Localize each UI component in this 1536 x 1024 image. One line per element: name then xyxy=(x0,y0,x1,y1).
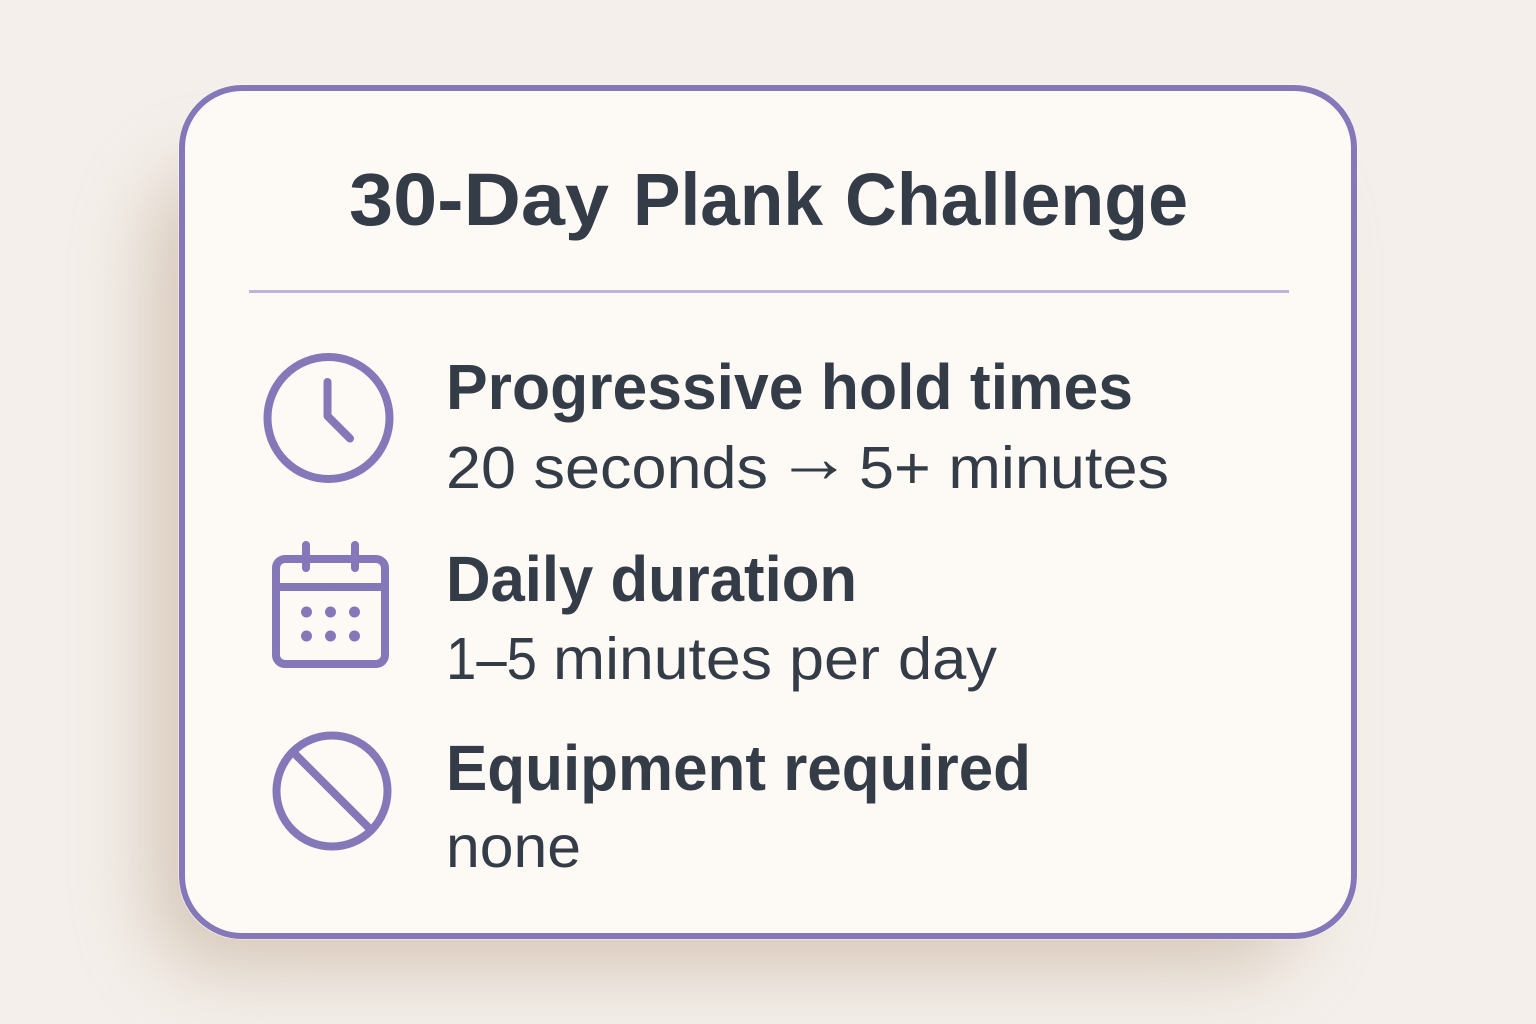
text block: progressive hold times: 5+ minutes xyxy=(859,435,1169,501)
text block: daily duration: per xyxy=(789,626,880,692)
text block: daily duration: minutes xyxy=(553,626,772,692)
text block: equipment required: none xyxy=(446,814,581,880)
text block: progressive hold times xyxy=(446,351,1169,501)
title: Challenge xyxy=(845,158,1188,241)
icon: calendar xyxy=(276,545,385,664)
panel: card xyxy=(182,88,1354,936)
text block: progressive hold times: 20 seconds xyxy=(446,435,768,501)
icon: clock xyxy=(268,357,390,479)
text block: daily duration: 1–5 xyxy=(446,626,537,692)
title: Plank xyxy=(633,158,824,241)
text block: daily duration xyxy=(446,543,998,692)
text block: equipment required xyxy=(446,732,1031,880)
text block: daily duration: Daily duration xyxy=(446,543,857,615)
icon: prohibited xyxy=(276,736,388,846)
title: 30-Day xyxy=(349,158,609,241)
text block: daily duration: day xyxy=(898,626,998,692)
text block: progressive hold times: Progressive hold times xyxy=(446,351,1133,423)
text block: progressive hold times: → xyxy=(776,418,852,498)
text block: equipment required: Equipment required xyxy=(446,732,1031,804)
